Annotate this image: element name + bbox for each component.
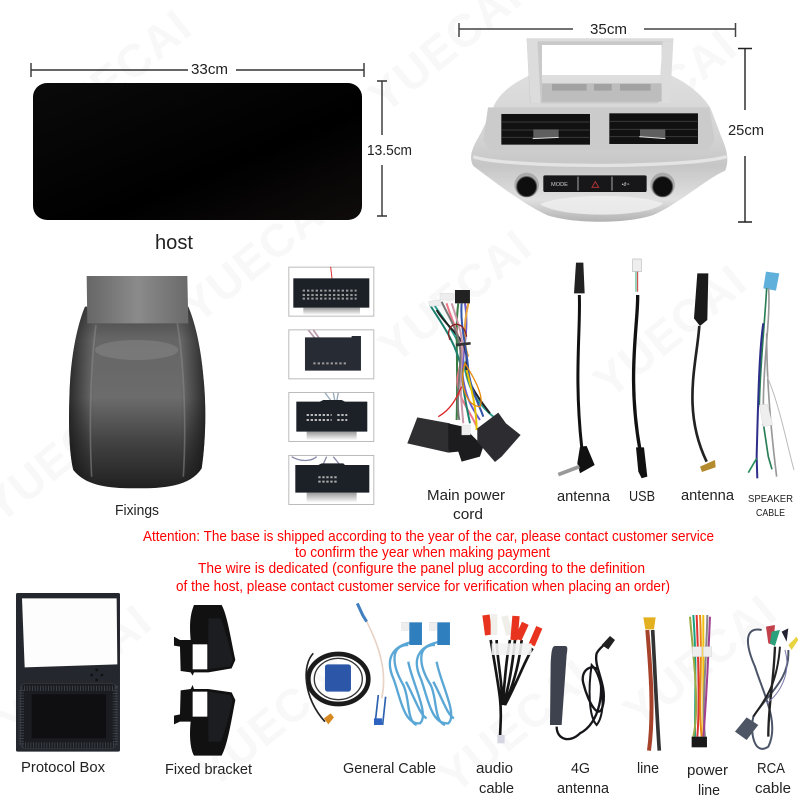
antenna 2 — [692, 273, 716, 472]
dash panel — [471, 38, 727, 222]
connector 2 — [289, 330, 374, 379]
label: RCA cable: RCA — [757, 760, 785, 777]
label: RCA cable — [755, 760, 791, 797]
white power wire — [358, 605, 384, 698]
connector photos — [289, 267, 374, 504]
label: general cable: General Cable — [343, 760, 436, 777]
label: main power cord: Main power — [427, 487, 505, 504]
attention notice: Attention: The base is shipped according to the year of the car, please contact customer service — [143, 529, 714, 545]
label: audio cable: audio — [476, 760, 513, 777]
connector 1 — [289, 267, 374, 316]
dimension: host width 33cm: 33cm — [191, 62, 228, 78]
dimension: panel height 25cm: 25cm — [728, 123, 764, 139]
watermark: YUECAI — [584, 254, 756, 408]
label: audio cable — [476, 760, 514, 797]
watermark: YUECAI — [614, 584, 786, 738]
USB cable — [633, 259, 647, 478]
label: power line: power — [687, 762, 728, 779]
host label: host — [155, 232, 193, 254]
frame — [527, 38, 673, 103]
main power cord — [407, 290, 521, 462]
label: RCA cable: cable — [755, 780, 791, 797]
label: speaker cable: CABLE — [756, 507, 785, 519]
watermark: YUECAI — [29, 0, 201, 153]
label: 4G antenna — [557, 760, 610, 797]
label: antenna: antenna — [557, 488, 611, 505]
label: power line: line — [698, 782, 720, 799]
attention notice: of the host, please contact customer service for verification when placing an order) — [176, 579, 670, 595]
fixed bracket — [174, 605, 235, 756]
watermark: YUECAI — [369, 219, 541, 373]
label: power line — [687, 762, 728, 799]
general cable — [306, 603, 454, 725]
watermark: YUECAI — [172, 179, 344, 333]
audio cable — [486, 614, 539, 743]
USB blue cable left — [390, 642, 427, 725]
label: protocol box: Protocol Box — [21, 759, 105, 776]
label: fixed bracket: Fixed bracket — [165, 761, 253, 778]
dimension: host width 33cm — [31, 62, 364, 78]
dimension: host height 13.5cm — [367, 81, 412, 216]
speaker cable — [748, 272, 794, 478]
fixings cover — [69, 276, 205, 488]
protocol box — [16, 593, 120, 752]
USB blue cable right — [417, 642, 454, 725]
upper bracket — [174, 605, 235, 676]
dash panel: MODE — [551, 182, 568, 188]
4G antenna — [550, 636, 615, 739]
vents — [501, 114, 590, 145]
label: audio cable: cable — [479, 780, 514, 797]
label: fixings: Fixings — [115, 502, 159, 519]
lower bracket — [174, 685, 235, 756]
attention notice — [143, 529, 714, 595]
antenna 1 — [558, 263, 595, 475]
GPS antenna — [306, 653, 368, 724]
attention notice: to confirm the year when making payment — [295, 545, 550, 561]
watermark: YUECAI — [429, 649, 601, 800]
knobs — [514, 173, 539, 197]
label: main power cord: cord — [453, 506, 483, 523]
RCA cable — [735, 625, 798, 749]
label: line: line — [637, 760, 659, 777]
label: main power cord — [427, 487, 505, 523]
label: antenna: antenna — [681, 487, 735, 504]
watermark: YUECAI — [574, 19, 746, 173]
labels row 3 — [21, 759, 791, 799]
label: 4G antenna: 4G — [571, 760, 590, 777]
harness — [690, 615, 712, 747]
label: 4G antenna: antenna — [557, 780, 610, 797]
attention notice: The wire is dedicated (configure the panel plug according to the definition — [198, 561, 645, 577]
dimension: panel width 35cm — [459, 22, 736, 38]
power line pair — [643, 617, 659, 751]
watermark: YUECAI — [187, 644, 359, 798]
dimension: host height 13.5cm: 13.5cm — [367, 143, 412, 159]
connector 3 — [289, 392, 374, 441]
dash panel: •∂∘ — [622, 181, 630, 188]
label: speaker cable — [748, 493, 793, 519]
label: speaker cable: SPEAKER — [748, 493, 793, 505]
dimension: panel height 25cm — [728, 48, 764, 222]
control strip — [543, 175, 647, 192]
labels row 2 — [115, 487, 793, 523]
dimension: panel width 35cm: 35cm — [590, 22, 627, 38]
connector 4 — [289, 455, 374, 504]
host screen — [33, 83, 362, 220]
label: USB: USB — [629, 488, 655, 505]
